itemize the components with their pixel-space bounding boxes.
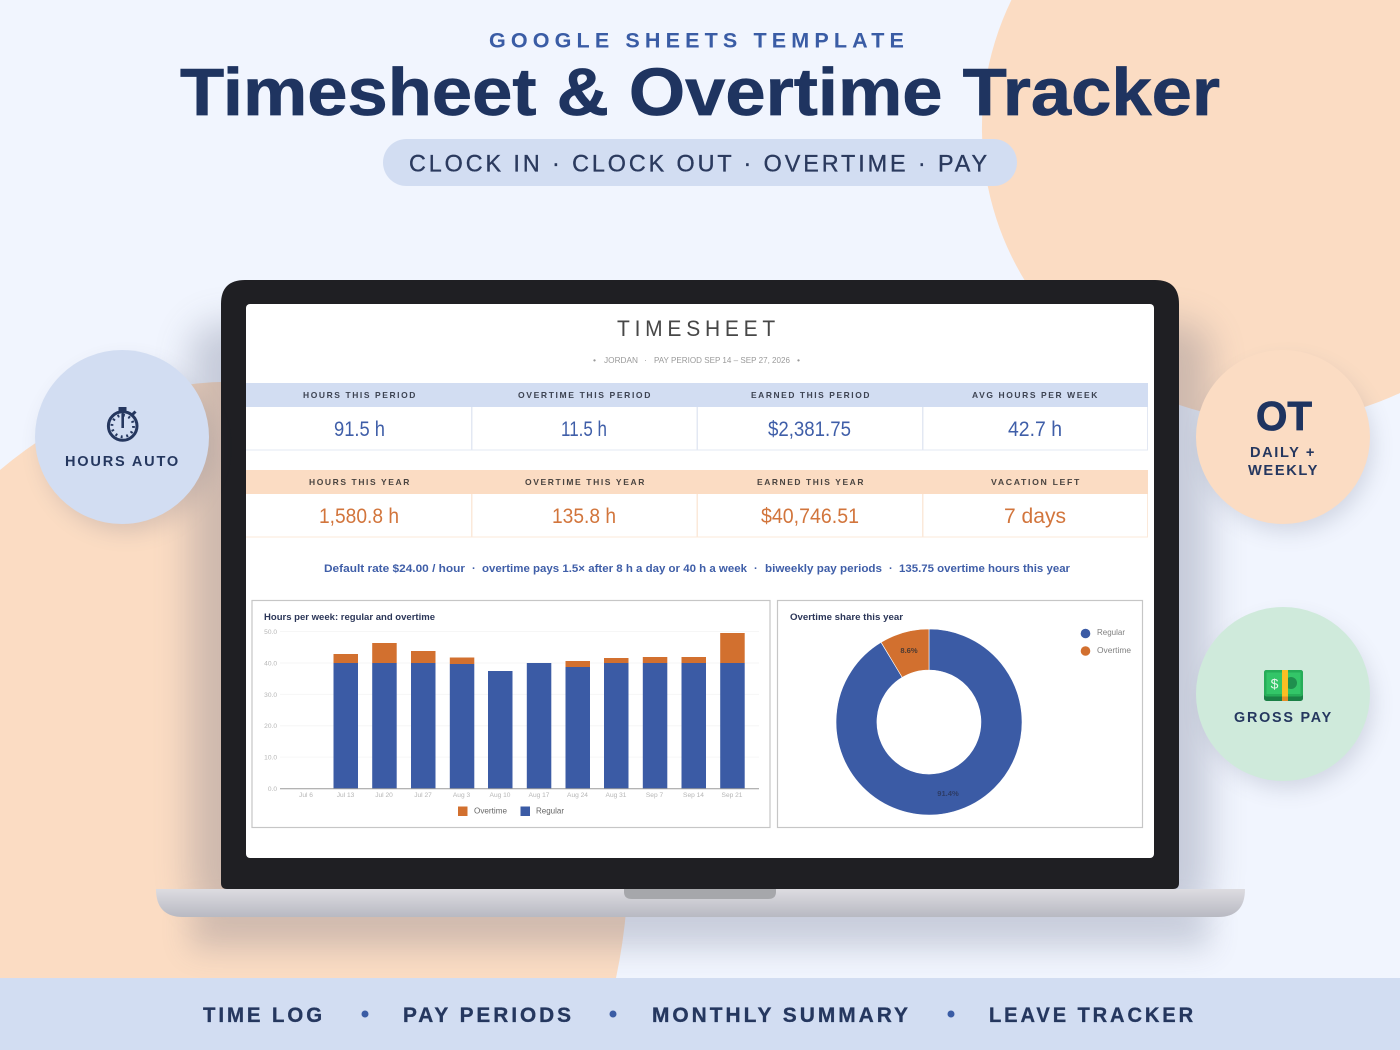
kpi: hours this year: HOURS THIS YEAR (309, 477, 411, 487)
kpi: vacation left: VACATION LEFT (991, 477, 1081, 487)
note line: biweekly pay periods (765, 563, 882, 575)
sheet heading: PAY PERIOD SEP 14 – SEP 27, 2026 (654, 355, 790, 365)
laptop base (156, 889, 1245, 917)
bottom banner: MONTHLY SUMMARY (652, 1004, 911, 1027)
y axis labels: 30.0 (264, 692, 277, 699)
badge: overtime daily and weekly: WEEKLY (1248, 463, 1319, 479)
kpi: hours this period: 91.5 h (334, 418, 385, 441)
kpi: overtime this period: OVERTIME THIS PERIOD (518, 390, 652, 400)
subtitle pill (383, 139, 1017, 186)
sheet heading: • (797, 355, 800, 365)
panel: bar chart (252, 600, 770, 828)
kpi: overtime this period (518, 390, 652, 441)
kpi: hours this period: HOURS THIS PERIOD (303, 390, 417, 400)
kpi: avg hours per week: 42.7 h (1008, 418, 1062, 441)
laptop bezel (221, 280, 1179, 889)
laptop (156, 280, 1245, 917)
bottom banner: PAY PERIODS (403, 1004, 574, 1027)
kpi: hours this year: 1,580.8 h (319, 505, 399, 528)
donut label: overtime: 8.6% (900, 646, 918, 655)
note line: 135.75 overtime hours this year (899, 563, 1071, 575)
bottom banner: LEAVE TRACKER (989, 1004, 1196, 1027)
kpi: overtime this year: 135.8 h (552, 505, 616, 528)
badge: gross pay (1196, 607, 1373, 789)
x axis labels: Jul 13 (337, 792, 355, 799)
panel: donut chart (778, 600, 1142, 828)
kpi: vacation left (991, 477, 1081, 528)
kpi: overtime this year (525, 477, 646, 528)
subtitle pill: CLOCK IN · CLOCK OUT · OVERTIME · PAY (409, 150, 990, 178)
eyebrow: GOOGLE SHEETS TEMPLATE (489, 30, 909, 52)
x axis labels (299, 792, 743, 799)
note line: · (754, 563, 758, 575)
donut: overtime segment (881, 629, 929, 677)
kpi: hours this year (309, 477, 411, 528)
icon: banknotes: $ (1271, 676, 1279, 692)
x axis labels: Jul 27 (414, 792, 432, 799)
x axis labels: Aug 31 (606, 792, 627, 799)
x axis labels: Aug 3 (453, 792, 470, 799)
y axis labels: 50.0 (264, 629, 277, 636)
icon: banknotes (1264, 670, 1303, 701)
x axis labels: Sep 21 (722, 792, 743, 799)
bottom banner: TIME LOG (203, 1004, 325, 1027)
y axis labels: 0.0 (268, 786, 277, 793)
chart title: Hours per week: regular and overtime (264, 612, 435, 623)
icon: stopwatch (108, 407, 137, 440)
sheet heading (593, 316, 800, 365)
x axis labels: Aug 24 (567, 792, 588, 799)
kpi: earned this period (751, 390, 871, 441)
title: Timesheet & Overtime Tracker (180, 55, 1220, 130)
kpi: overtime this period: 11.5 h (561, 418, 607, 441)
badge: overtime daily and weekly: DAILY + (1250, 445, 1316, 461)
kpi: earned this period: EARNED THIS PERIOD (751, 390, 871, 400)
kpi: vacation left: 7 days (1004, 505, 1066, 528)
donut legend: Overtime (1097, 646, 1131, 655)
kpi: earned this period: $2,381.75 (768, 418, 851, 441)
sheet heading: • (593, 355, 596, 365)
stacked bars: overtime (334, 633, 745, 667)
x axis labels: Sep 7 (646, 792, 663, 799)
sheet heading: · (644, 355, 647, 365)
x axis labels: Aug 10 (490, 792, 511, 799)
laptop base shadow (190, 908, 1210, 950)
sheet heading: TIMESHEET (617, 316, 780, 341)
y axis labels: 10.0 (264, 754, 277, 762)
note line (324, 563, 1071, 575)
note line: · (472, 563, 476, 575)
donut: regular segment (836, 629, 1022, 815)
bottom banner (0, 978, 1400, 1050)
badge: hours auto (35, 350, 212, 532)
note line: overtime pays 1.5× after 8 h a day or 40 h a week (482, 563, 748, 575)
kpi: hours this period (303, 390, 417, 441)
y axis labels: 40.0 (264, 660, 277, 668)
badge: gross pay: GROSS PAY (1234, 710, 1333, 726)
x axis labels: Jul 6 (299, 792, 313, 799)
header (180, 30, 1220, 186)
background: peach blob bottom left (0, 382, 628, 978)
KPI row: this year (246, 470, 1148, 538)
note line: Default rate $24.00 / hour (324, 563, 466, 575)
y axis labels (264, 629, 277, 793)
kpi: earned this year: EARNED THIS YEAR (757, 477, 865, 487)
bar chart legend (458, 806, 564, 816)
laptop notch (624, 889, 776, 899)
badge: overtime daily and weekly (1196, 350, 1373, 532)
bar chart legend: Overtime (474, 806, 508, 816)
laptop shadow (190, 322, 1210, 912)
x axis labels: Aug 17 (529, 792, 550, 799)
stacked bars: regular (334, 663, 745, 788)
y axis labels: 20.0 (264, 723, 277, 730)
note line: · (889, 563, 893, 575)
background: peach blob top right (982, 0, 1400, 421)
kpi: overtime this year: OVERTIME THIS YEAR (525, 477, 646, 487)
x axis labels: Jul 20 (375, 792, 393, 799)
kpi: earned this year (757, 477, 865, 528)
bar chart legend: Regular (536, 806, 564, 816)
badge: hours auto: HOURS AUTO (65, 454, 180, 470)
donut legend: Regular (1097, 628, 1125, 637)
donut label: regular: 91.4% (937, 789, 959, 798)
sheet heading: JORDAN (604, 355, 638, 365)
donut title: Overtime share this year (790, 612, 903, 623)
kpi: earned this year: $40,746.51 (761, 505, 859, 528)
kpi: avg hours per week: AVG HOURS PER WEEK (972, 390, 1099, 400)
badge: overtime daily and weekly: OT (1256, 393, 1312, 439)
KPI row: this period (246, 383, 1148, 450)
donut legend (1081, 628, 1131, 656)
laptop screen (246, 304, 1154, 858)
x axis labels: Sep 14 (683, 792, 704, 799)
kpi: avg hours per week (972, 390, 1099, 441)
